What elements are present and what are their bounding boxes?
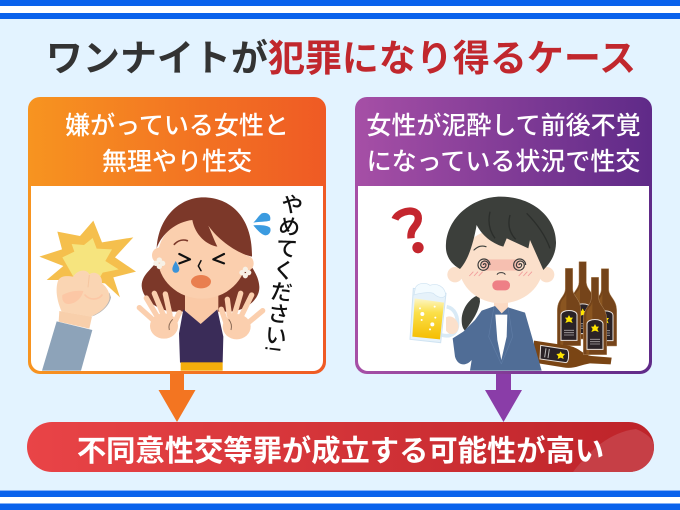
top double stripe: [0, 0, 680, 19]
panel frame: [355, 97, 652, 374]
hands: [139, 293, 263, 327]
panel: forced against her will: [28, 97, 326, 374]
icon: fist and impact burst: [39, 221, 136, 371]
title: ワンナイトが犯罪になり得るケース: [46, 38, 636, 79]
panel frame: [28, 97, 326, 374]
panel heading: になっている状況で性交: [367, 148, 640, 176]
panel heading: 女性が泥酔して前後不覚: [366, 112, 641, 140]
icon: drunk woman: [410, 197, 556, 371]
panel heading: 嫌がっている女性と: [65, 112, 289, 140]
panel heading: 無理やり性交: [102, 148, 252, 176]
panel illustration area: [31, 186, 323, 371]
icon: beer bottles: [534, 262, 617, 368]
banner text: 不同意性交等罪が成立する可能性が高い: [77, 434, 604, 468]
icon: question mark: [395, 211, 424, 253]
speech text: stop please: やめてください!: [260, 191, 304, 353]
icon: crying woman: [139, 197, 271, 371]
bottom double stripe: [0, 490, 680, 510]
banner highlight: [573, 429, 654, 472]
hair top: [157, 197, 252, 257]
panel illustration area: [358, 186, 649, 371]
arrow: orange: [158, 374, 196, 422]
panel: incapacitated by alcohol: [355, 97, 652, 374]
conclusion banner: [27, 422, 654, 472]
banner pill: [27, 422, 654, 472]
arrow: purple: [485, 374, 522, 422]
